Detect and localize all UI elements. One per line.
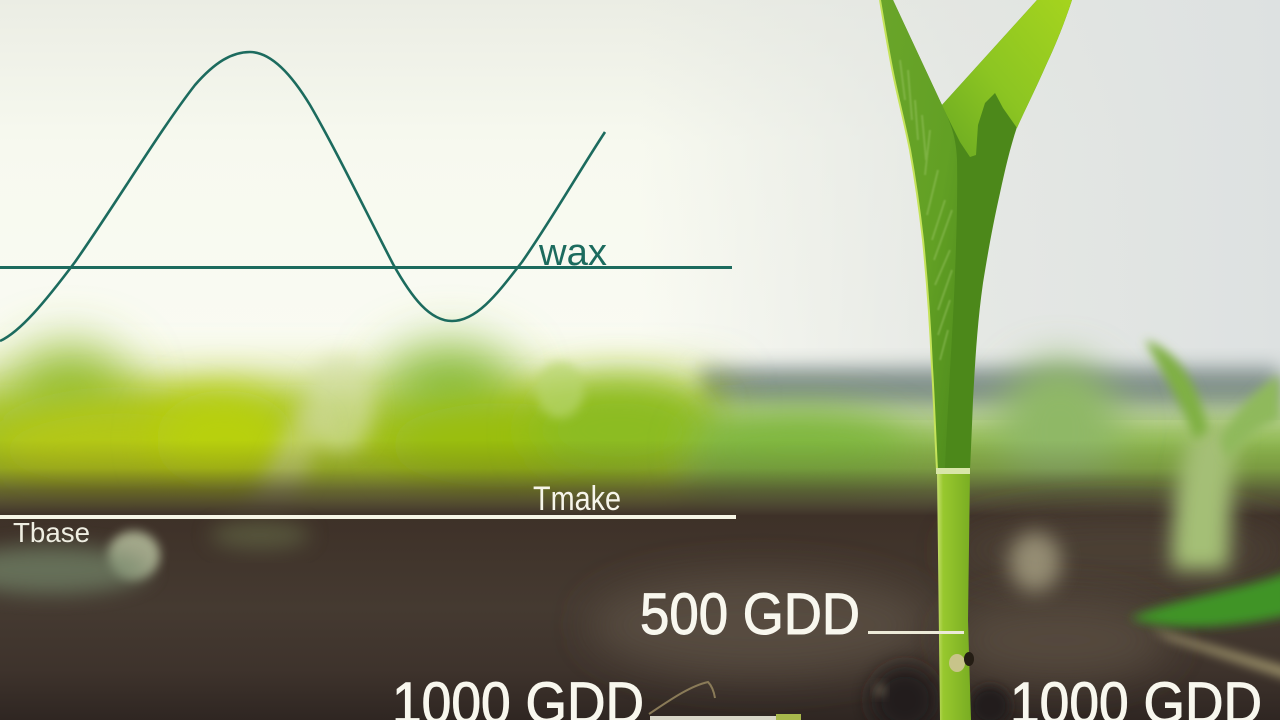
leader line [650, 716, 776, 720]
leaf veins [900, 60, 952, 360]
stem node [936, 468, 970, 474]
background: blurred young plants [1130, 340, 1280, 680]
background: soil [0, 440, 1280, 720]
stem [937, 472, 971, 720]
label: 500 GDD: 500 GDD [640, 582, 860, 647]
label: Tmake: Tmake [533, 480, 621, 518]
corn seedling [880, 0, 1072, 720]
sine curve [0, 52, 605, 341]
threshold line [0, 266, 732, 269]
background: blurred green crop row [0, 345, 1280, 540]
leader line [868, 631, 964, 634]
temperature curve chart [0, 52, 732, 341]
base temperature line [0, 480, 736, 548]
right leaf bright upper face [942, 0, 1072, 157]
leader tip [776, 714, 801, 720]
white line [0, 515, 736, 519]
label: 1000 GDD left [392, 671, 801, 720]
leaf edge highlight [880, 0, 937, 470]
label: Tbase: Tbase [13, 517, 90, 548]
leaf base shape [880, 0, 1072, 470]
left leaf light face [880, 0, 957, 470]
label: wax: wax [538, 232, 607, 274]
soil clods by stem [649, 666, 1010, 720]
seed husk [949, 652, 974, 672]
background: blurred horizon [700, 368, 1280, 408]
